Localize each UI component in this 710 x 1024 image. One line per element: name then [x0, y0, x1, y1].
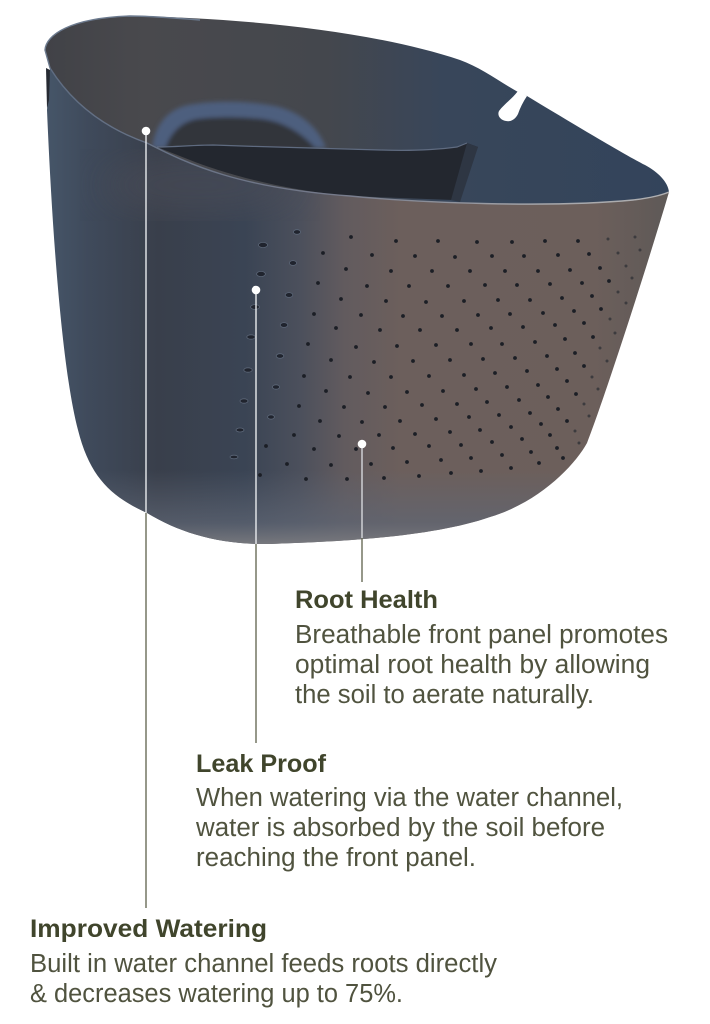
rounded handle inside planter [152, 102, 326, 149]
water channel divider [157, 143, 478, 202]
text block: improved watering [30, 915, 497, 1008]
body: root health: the soil to aerate naturally. [295, 681, 594, 709]
hanging tab on left edge [46, 68, 50, 108]
body: root health: optimal root health by allowing [295, 651, 650, 679]
heading: improved watering: Improved Watering [30, 915, 267, 943]
body: improved watering: & decreases watering up to 75%. [30, 980, 403, 1008]
water drop notch [498, 91, 527, 121]
planter interior back wall [45, 16, 669, 204]
breathable holes, front panel [260, 237, 609, 479]
heading: root health: Root Health [295, 586, 438, 614]
back rim highlight [45, 16, 200, 68]
body: leak proof: water is absorbed by the soil before [195, 814, 605, 842]
planter photo [40, 16, 680, 550]
text block: root health [295, 586, 668, 709]
front panel [40, 60, 680, 550]
text block: leak proof [195, 750, 623, 872]
body: root health [295, 621, 668, 709]
faint holes near right edge [575, 237, 640, 443]
breathable holes, left side [230, 230, 301, 459]
body: leak proof: reaching the front panel. [196, 844, 476, 872]
body: leak proof [195, 784, 623, 872]
body: improved watering [30, 950, 497, 1008]
body: improved watering: Built in water channel feeds roots directly [30, 950, 497, 978]
callout line: leak proof [252, 286, 260, 743]
callout line: root health [358, 440, 366, 582]
heading: leak proof: Leak Proof [196, 750, 327, 778]
front rim highlight [50, 68, 669, 204]
callout line: improved watering [142, 127, 150, 908]
body: leak proof: When watering via the water channel, [196, 784, 623, 812]
body: root health: Breathable front panel promotes [295, 621, 668, 649]
